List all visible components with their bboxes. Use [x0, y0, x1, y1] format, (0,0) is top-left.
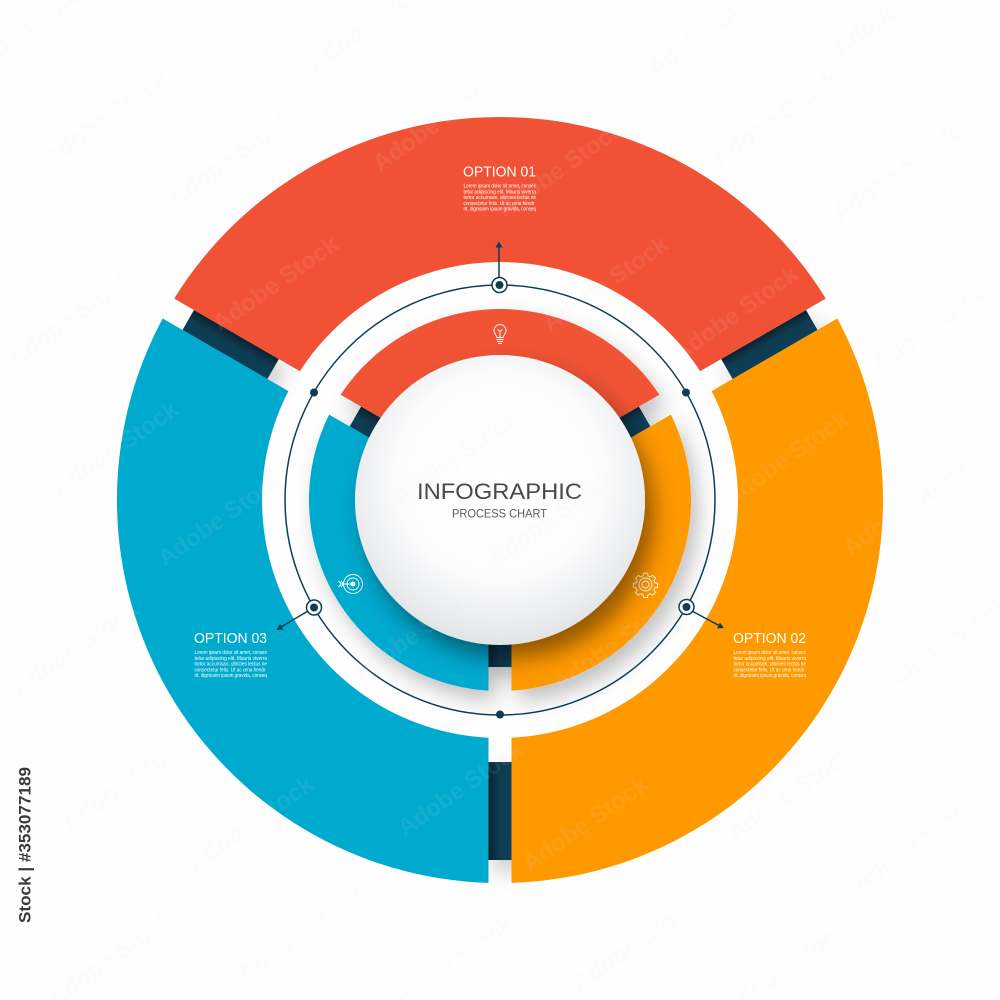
watermark pattern: Adobe Stock — [568, 890, 704, 997]
icon: light bulb — [494, 324, 506, 344]
watermark pattern: Adobe Stock — [208, 230, 344, 337]
watermark pattern: Adobe Stock — [868, 270, 1000, 377]
watermark pattern: Adobe Stock — [723, 740, 859, 847]
watermark pattern: Adobe Stock — [3, 265, 139, 372]
small ring dots — [310, 388, 690, 718]
watermark pattern: Adobe Stock — [48, 395, 184, 502]
watermark pattern: Adobe Stock — [393, 735, 529, 842]
text block: option 03 — [194, 631, 267, 679]
text block: option 02: OPTION 02 — [733, 631, 806, 647]
text block: option 01: OPTION 01 — [463, 164, 536, 180]
text block: option 02: tetur adipiscing elit. Mauris viverra — [734, 656, 806, 662]
stock id caption: Stock | #353077189 — [16, 767, 34, 923]
watermark pattern: Adobe Stock — [668, 260, 804, 367]
text block: option 03: OPTION 03 — [194, 631, 267, 647]
watermark pattern: Adobe Stock — [388, 405, 524, 512]
outer segment: option 03 — [5, 282, 551, 974]
center circle — [355, 355, 645, 645]
subtitle: PROCESS CHART — [452, 506, 548, 520]
timeline ring — [285, 285, 715, 715]
watermark pattern: Adobe Stock — [153, 465, 289, 572]
arrow and node: option 02 — [679, 600, 724, 628]
text block: option 02: tortor accumsan, ultricies lectus ne — [734, 662, 806, 668]
text block: option 03: consectetur felis. Ut ac urna hendr — [194, 668, 266, 674]
watermark pattern: Adobe Stock — [183, 770, 319, 877]
text block: option 02: rit, dignissim ipsum gravida, conseq — [734, 673, 806, 679]
outer segment: option 02 — [449, 282, 995, 974]
watermark pattern: Adobe Stock — [8, 595, 144, 702]
icon: target with arrow — [338, 574, 362, 594]
watermark pattern: Adobe Stock — [518, 770, 654, 877]
watermark pattern: Adobe Stock — [828, 120, 964, 227]
watermark pattern: Adobe Stock — [848, 790, 984, 897]
text block: option 02 — [733, 631, 806, 679]
arrow and node: option 01 — [492, 242, 507, 292]
text block: option 01: rit, dignissim ipsum gravida, conseq — [464, 207, 536, 213]
text block: option 01: consectetur felis. Ut ac urna hendr — [464, 201, 535, 207]
inner ring: dark connectors and coloured segments — [255, 309, 745, 734]
arrow and node: option 03 — [276, 600, 322, 630]
outer segment: option 01 — [174, 117, 826, 371]
watermark pattern: Adobe Stock — [493, 115, 629, 222]
watermark pattern: Adobe Stock — [163, 105, 299, 212]
title: INFOGRAPHIC — [417, 479, 582, 504]
text block: option 03: rit, dignissim ipsum gravida, conseq — [194, 673, 267, 679]
watermark pattern: Adobe Stock — [348, 580, 484, 687]
watermark pattern: Adobe Stock — [233, 880, 369, 987]
watermark pattern: Adobe Stock — [838, 455, 974, 562]
watermark pattern: Adobe Stock — [538, 230, 674, 337]
watermark pattern: Adobe Stock — [58, 730, 194, 837]
text block: option 03: Lorem ipsum dolor sit amet, consec — [194, 650, 267, 656]
watermark pattern: Adobe Stock — [718, 405, 854, 512]
outer ring dark connectors — [182, 310, 818, 860]
text block: option 01: Lorem ipsum dolor sit amet, consec — [464, 184, 536, 190]
watermark pattern: Adobe Stock — [548, 590, 684, 697]
text block: option 02: consectetur felis. Ut ac urna hendr — [734, 668, 805, 674]
watermark pattern: Adobe Stock — [38, 65, 174, 172]
watermark pattern: Adobe Stock — [708, 65, 844, 172]
text block: option 03: tortor accumsan, ultricies lectus ne — [194, 662, 267, 668]
text block: option 02: Lorem ipsum dolor sit amet, consec — [734, 650, 806, 656]
watermark pattern: Adobe Stock — [368, 70, 504, 177]
text block: option 01: tetur adipiscing elit. Mauris viverra — [464, 189, 536, 195]
text block: option 01 — [463, 164, 536, 213]
watermark pattern: Adobe Stock — [483, 465, 619, 572]
icon: gear — [633, 573, 658, 597]
text block: option 01: tortor accumsan, ultricies lectus ne — [464, 195, 536, 201]
text block: option 03: tetur adipiscing elit. Mauris viverra — [194, 656, 267, 662]
